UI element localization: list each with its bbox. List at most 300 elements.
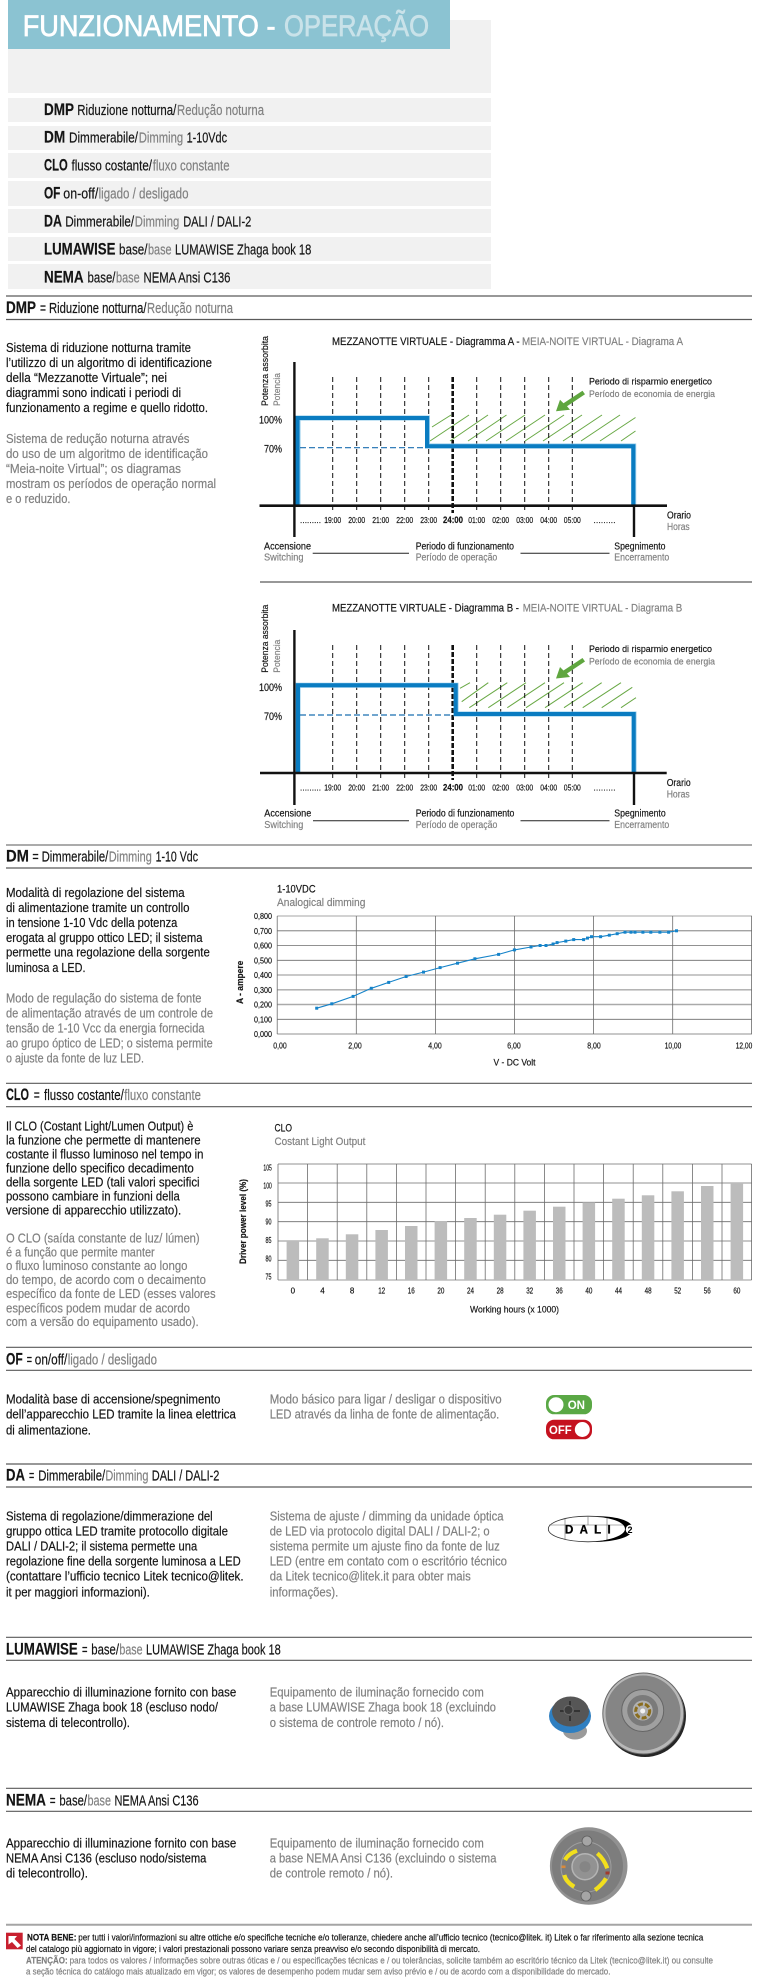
time labels: 04:00 <box>540 516 558 525</box>
text: DA Italian: gruppo ottica LED tramite protocollo digitale <box>6 1524 228 1538</box>
time labels: ......... <box>300 516 321 525</box>
text: DM Italian: erogata al gruppo ottico LED; il sistema <box>6 931 203 945</box>
time labels: 21:00 <box>372 516 390 525</box>
y tick labels: 0,000 <box>254 1030 272 1039</box>
level labels: 100% <box>259 682 282 694</box>
summary list of functions: LUMAWISE Zhaga book 18 <box>175 243 311 259</box>
heading: DA: Dimmerabile/ <box>38 1468 106 1484</box>
x tick labels: 44 <box>615 1286 622 1295</box>
text: NEMA Portuguese <box>270 1836 496 1880</box>
heading: LUMAWISE: base <box>119 1642 143 1658</box>
power line <box>298 685 634 773</box>
heading: OF: OF <box>6 1349 23 1368</box>
y axis label: Potencia <box>272 372 283 406</box>
heading: OF <box>6 1347 752 1370</box>
y tick labels: 100 <box>263 1182 272 1190</box>
time labels: 03:00 <box>516 516 534 525</box>
text: LUMAWISE Italian: sistema di telecontrollo). <box>6 1716 130 1730</box>
x axis title: Horas <box>667 790 690 800</box>
time labels: 22:00 <box>396 784 414 792</box>
x tick labels: 48 <box>645 1286 652 1295</box>
time labels <box>300 515 616 525</box>
y axis label <box>260 604 283 673</box>
text: OF Italian: Modalità base di accensione/spegnimento <box>6 1392 220 1406</box>
heading: LUMAWISE: = <box>82 1642 88 1658</box>
timeline labels: Período de operação <box>416 820 498 831</box>
summary list of functions: base <box>148 243 172 259</box>
text: CLO Italian: della sorgente LED (tali valori specifici <box>6 1176 200 1190</box>
diagram A <box>259 335 716 564</box>
time labels: 21:00 <box>372 784 390 792</box>
heading: OF: = <box>27 1352 32 1368</box>
title: FUNZIONAMENTO - <box>23 10 276 43</box>
text: DMP Portuguese: e o reduzido. <box>6 492 70 506</box>
y tick labels <box>263 1163 272 1282</box>
text: CLO Portuguese: específico da fonte de LED (esses valores <box>6 1287 216 1301</box>
y tick labels: 105 <box>263 1163 272 1172</box>
text: CLO Italian: possono cambiare in funzioni della <box>6 1189 180 1203</box>
x tick labels: 4 <box>320 1286 325 1295</box>
title: OPERAÇÃO <box>284 9 429 43</box>
text: NEMA Italian: NEMA Ansi C136 (escluso nodo/sistema <box>6 1851 206 1865</box>
icon: DALI-2 logo: 2 <box>628 1525 633 1535</box>
heading: LUMAWISE <box>6 1637 752 1660</box>
teal title band <box>8 0 450 49</box>
text: DMP Italian: Sistema di riduzione notturna tramite <box>6 341 191 355</box>
time labels: 23:00 <box>420 784 438 792</box>
timeline labels: Accensione <box>264 809 312 820</box>
note Portuguese: ATENÇÃO: <box>26 1955 68 1966</box>
summary list of functions: 1-10Vdc <box>187 131 227 147</box>
axis titles <box>235 961 536 1069</box>
text: LUMAWISE Portuguese: o sistema de controle remoto / nó). <box>270 1716 444 1730</box>
text: CLO Italian: costante il flusso luminoso nel tempo in <box>6 1148 204 1162</box>
text: CLO Italian <box>6 1120 204 1217</box>
heading: DMP <box>6 296 752 320</box>
time labels: 01:00 <box>468 784 486 792</box>
text: NEMA Portuguese: de controle remoto / nó). <box>270 1866 393 1880</box>
text: OF Portuguese: Modo básico para ligar / desligar o dispositivo <box>270 1392 502 1406</box>
timeline labels: Periodo di funzionamento <box>416 809 515 820</box>
heading: NEMA: NEMA <box>6 1790 46 1809</box>
icon: warning arrow <box>6 1933 23 1949</box>
text: DM Italian: in tensione 1-10 Vdc della potenza <box>6 916 177 930</box>
text: DMP Portuguese: mostram os períodos de operação normal <box>6 477 216 491</box>
diagram B: MEZZANOTTE VIRTUALE - Diagramma B - <box>332 603 519 615</box>
heading: LUMAWISE: LUMAWISE <box>6 1639 78 1658</box>
time labels: 24:00 <box>443 782 463 792</box>
text: DM Portuguese: de alimentação através de um controle de <box>6 1007 213 1021</box>
level labels: 100% <box>259 415 282 427</box>
x tick labels: 52 <box>674 1286 682 1295</box>
timeline labels: Spegnimento <box>614 809 666 820</box>
level labels: 70% <box>264 711 282 723</box>
data line <box>315 929 678 1010</box>
y tick labels: 0,500 <box>254 956 272 965</box>
text: DA Portuguese: informações). <box>270 1585 338 1599</box>
text: NEMA Portuguese: Equipamento de iluminação fornecido com <box>270 1836 484 1850</box>
level labels <box>259 415 282 456</box>
text: DA Italian: regolazione fine della sorgente luminosa a LED <box>6 1554 241 1568</box>
summary list of functions: Dimmerabile/ <box>65 215 135 231</box>
y tick labels: 0,600 <box>254 942 272 950</box>
text: DM Portuguese <box>6 992 213 1066</box>
timeline labels: Período de operação <box>416 553 498 564</box>
text: DA Portuguese: sistema permite um ajuste fino da fonte de luz <box>270 1539 500 1553</box>
diagram B <box>259 582 752 831</box>
heading: DMP: = <box>40 301 46 317</box>
x tick labels: 6,00 <box>507 1042 521 1050</box>
summary list of functions: fluxo constante <box>153 159 230 175</box>
summary list of functions: NEMA <box>44 267 84 286</box>
x tick labels: 4,00 <box>428 1042 442 1050</box>
text: CLO Portuguese: do tempo, de acordo com o decaimento <box>6 1273 206 1287</box>
chart grid <box>277 916 752 1034</box>
axes <box>260 630 667 805</box>
text: DM Italian: permette una regolazione della sorgente <box>6 946 210 960</box>
x tick labels: 60 <box>733 1286 741 1295</box>
diagram B: MEIA-NOITE VIRTUAL - Diagrama B <box>523 603 682 615</box>
hour grid <box>333 377 572 513</box>
axis titles <box>238 1179 559 1316</box>
y tick labels: 0,200 <box>254 1000 272 1010</box>
bar chart: CLO <box>238 1122 752 1316</box>
timeline labels: Encerramento <box>614 553 670 564</box>
text: CLO Portuguese <box>6 1231 216 1329</box>
text: LUMAWISE Italian: Apparecchio di illuminazione fornito con base <box>6 1685 236 1699</box>
time labels: ......... <box>300 784 321 792</box>
summary list of functions: ligado / desligado <box>99 187 188 203</box>
text: DA Italian: it per maggiori informazioni). <box>6 1585 150 1599</box>
text: DM Portuguese: o ajuste da fonte de luz LED. <box>6 1052 144 1066</box>
text: DM Italian: Modalità di regolazione del sistema <box>6 886 185 900</box>
x tick labels: 10,00 <box>665 1042 682 1050</box>
icon: NEMA socket <box>550 1827 628 1905</box>
axes <box>260 362 667 537</box>
text: DM Portuguese: Modo de regulação do sistema de fonte <box>6 992 202 1006</box>
y axis label: Potenza assorbita <box>260 335 271 406</box>
line chart: 1-10VDC: Analogical dimming <box>277 897 365 909</box>
toggle on: ON <box>568 1400 585 1412</box>
text: DMP Portuguese: Sistema de redução noturna através <box>6 432 190 446</box>
time labels: 24:00 <box>443 515 463 525</box>
text: OF Portuguese: LED através da linha de fonte de alimentação. <box>270 1408 499 1422</box>
note Italian: NOTA BENE: <box>27 1932 76 1943</box>
text: NEMA Italian: Apparecchio di illuminazione fornito con base <box>6 1836 236 1850</box>
time labels: 02:00 <box>492 784 510 792</box>
axis titles: Driver power level (%) <box>238 1179 248 1264</box>
x axis title <box>667 510 691 533</box>
text: DA Italian: DALI / DALI-2; il sistema permette una <box>6 1539 197 1553</box>
text: DMP Italian: funzionamento a regime e quello ridotto. <box>6 401 208 415</box>
timeline labels: Spegnimento <box>614 541 666 552</box>
summary list of functions: Redução noturna <box>177 103 265 119</box>
x tick labels: 8,00 <box>587 1042 601 1050</box>
icon: Lumawise connector <box>549 1696 591 1740</box>
level labels <box>259 682 282 723</box>
x tick labels: 2,00 <box>348 1042 362 1050</box>
footer note <box>6 1925 752 1977</box>
heading: DMP: DMP <box>6 298 36 317</box>
summary list of functions: base/ <box>88 270 116 286</box>
text: CLO Italian: la funzione che permette di mantenere <box>6 1134 201 1148</box>
time labels: ......... <box>594 784 616 792</box>
power line <box>298 418 634 505</box>
saving legend <box>589 644 716 667</box>
summary list of functions: base <box>116 270 140 286</box>
x tick labels: 28 <box>497 1286 504 1295</box>
note Portuguese: a seção técnica do catálogo mais atualizado em vigor; os valores de desempenho podem mudar sem aviso prévio e / ou de acordo com a disponibilidade do mercado. <box>26 1966 610 1977</box>
heading: DMP: Redução noturna <box>147 301 234 317</box>
heading: CLO: flusso costante/ <box>44 1088 125 1104</box>
axis titles: A - ampere <box>235 961 245 1004</box>
summary list of functions: on-off/ <box>63 187 99 203</box>
y tick labels: 75 <box>266 1273 272 1282</box>
text: DA Portuguese <box>270 1509 507 1599</box>
text: CLO Italian: versione di apparecchio utilizzato). <box>6 1203 181 1217</box>
text: LUMAWISE Portuguese <box>270 1685 496 1730</box>
x tick labels: 40 <box>585 1286 593 1295</box>
x tick labels <box>273 1042 753 1050</box>
text: DA Portuguese: LED (entre em contato com o escritório técnico <box>270 1554 507 1568</box>
level labels: 70% <box>264 444 282 456</box>
heading: NEMA: base <box>88 1793 111 1809</box>
text: DA Portuguese: de LED via protocolo digital DALI / DALI-2; o <box>270 1524 490 1538</box>
summary list of functions: DALI / DALI-2 <box>183 215 251 231</box>
x tick labels: 32 <box>526 1286 534 1295</box>
heading: DA: DA <box>6 1465 25 1484</box>
y tick labels: 0,400 <box>254 971 272 980</box>
heading: DA: = <box>29 1468 34 1484</box>
y tick labels: 0,700 <box>254 927 272 936</box>
text: CLO Italian: Il CLO (Costant Light/Lumen Output) è <box>6 1120 193 1134</box>
time labels: 20:00 <box>348 516 366 525</box>
timeline labels <box>264 809 670 831</box>
text: DA Italian <box>6 1509 244 1599</box>
summary list of functions: OF <box>44 184 60 203</box>
text: DA Portuguese: da Litek tecnico@litek.it para obter mais <box>270 1569 471 1583</box>
y axis label: Potencia <box>272 639 283 673</box>
heading: OF: ligado / desligado <box>68 1352 157 1368</box>
note Portuguese <box>26 1955 713 1977</box>
text: OF Portuguese <box>270 1392 502 1422</box>
heading: NEMA: base/ <box>59 1793 88 1809</box>
text: DA Portuguese: Sistema de ajuste / dimming da unidade óptica <box>270 1509 504 1523</box>
summary list of functions: Riduzione notturna/ <box>77 103 177 119</box>
text: DMP Italian: diagrammi sono indicati i periodi di <box>6 386 181 400</box>
y tick labels: 80 <box>266 1254 272 1263</box>
time labels: 02:00 <box>492 516 510 525</box>
heading: CLO: fluxo constante <box>124 1088 201 1104</box>
x tick labels: 0 <box>291 1286 296 1295</box>
summary list of functions: base/ <box>119 243 148 259</box>
x tick labels: 56 <box>704 1286 711 1295</box>
summary list of functions: NEMA Ansi C136 <box>144 270 230 286</box>
text: DM Portuguese: ao grupo óptico de LED; o sistema permite <box>6 1037 213 1051</box>
text: DM Portuguese: tensão de 1-10 Vcc da energia fornecida <box>6 1022 205 1036</box>
text: LUMAWISE Italian: LUMAWISE Zhaga book 18 (escluso nodo/ <box>6 1700 218 1714</box>
hour grid <box>333 645 572 780</box>
heading: NEMA <box>6 1788 752 1811</box>
summary list of functions: flusso costante/ <box>72 159 153 175</box>
timeline labels: Encerramento <box>614 820 670 831</box>
saving legend: Periodo di risparmio energetico <box>589 377 712 388</box>
heading: DM <box>6 845 752 868</box>
y axis label <box>260 335 283 406</box>
summary list of functions: CLO <box>44 156 68 175</box>
y tick labels <box>254 912 272 1039</box>
time labels: 19:00 <box>324 784 342 792</box>
y tick labels: 95 <box>266 1200 272 1209</box>
text: CLO Portuguese: é a função que permite manter <box>6 1245 155 1259</box>
text: DA Italian: (contattare l’ufficio tecnico Litek tecnico@litek. <box>6 1569 244 1583</box>
text: NEMA Italian: di telecontrollo). <box>6 1866 88 1880</box>
text: DMP Italian: della “Mezzanotte Virtuale”; nei <box>6 371 167 385</box>
x tick labels <box>291 1286 741 1295</box>
heading: DM: 1-10 Vdc <box>156 850 198 866</box>
heading: OF: on/off/ <box>35 1352 68 1368</box>
time labels: ......... <box>594 516 616 525</box>
time labels: 20:00 <box>348 784 366 792</box>
x tick labels: 12,00 <box>736 1042 753 1050</box>
timeline labels: Periodo di funzionamento <box>416 541 514 552</box>
text: DMP Italian: l’utilizzo di un algoritmo di identificazione <box>6 356 212 370</box>
y tick labels: 90 <box>266 1218 272 1227</box>
time labels: 05:00 <box>564 516 581 525</box>
text: NEMA Italian <box>6 1836 236 1880</box>
text: NEMA Portuguese: a base NEMA Ansi C136 (excluindo o sistema <box>270 1851 496 1865</box>
text: DMP Portuguese <box>6 432 216 506</box>
saving legend <box>589 377 716 400</box>
chart grid <box>278 1164 752 1280</box>
bars <box>287 1183 743 1280</box>
note Italian: del catalogo più aggiornato in vigore; i valori prestazionali possono variare senza preavviso e/o secondo disponibilità di mercato. <box>26 1944 480 1955</box>
heading: CLO: CLO <box>6 1085 29 1104</box>
toggle off: OFF <box>549 1425 572 1437</box>
saving legend: Período de economia de energia <box>589 389 716 400</box>
text: OF Italian: di alimentazione. <box>6 1423 91 1437</box>
saving legend: Período de economia de energia <box>589 656 716 667</box>
axis titles: V - DC Volt <box>494 1058 536 1069</box>
axis titles: Working hours (x 1000) <box>470 1305 559 1316</box>
text: DM Italian: luminosa a LED. <box>6 961 86 975</box>
summary list of functions <box>8 98 491 289</box>
x tick labels: 8 <box>350 1286 355 1295</box>
heading: DM: = <box>32 850 39 866</box>
bar chart: CLO: Costant Light Output <box>274 1136 365 1148</box>
heading: DM: DM <box>6 847 29 866</box>
heading: DA: DALI / DALI-2 <box>152 1468 219 1484</box>
x tick labels: 12 <box>378 1286 386 1295</box>
time labels: 04:00 <box>540 784 558 792</box>
title <box>23 9 429 43</box>
text: CLO Portuguese: O CLO (saída constante de luz/ lúmen) <box>6 1231 200 1245</box>
heading: LUMAWISE: base/ <box>91 1642 120 1658</box>
summary list of functions: Dimming <box>135 215 179 231</box>
text: OF Italian: dell’apparecchio LED tramite la linea elettrica <box>6 1408 236 1422</box>
x tick labels: 36 <box>556 1286 563 1295</box>
timeline labels: Switching <box>264 553 304 564</box>
x tick labels: 16 <box>408 1286 415 1295</box>
y axis label: Potenza assorbita <box>260 604 271 673</box>
saving legend: Periodo di risparmio energetico <box>589 644 712 655</box>
line chart: 1-10VDC <box>235 883 753 1069</box>
text: DMP Italian <box>6 341 212 415</box>
text: CLO Portuguese: o fluxo luminoso constante ao longo <box>6 1259 188 1273</box>
grey header panel <box>8 20 491 93</box>
x tick labels: 20 <box>437 1286 445 1295</box>
heading: DA: Dimming <box>105 1468 148 1484</box>
text: LUMAWISE Portuguese: a base LUMAWISE Zhaga book 18 (excluindo <box>270 1700 496 1714</box>
text: OF Italian <box>6 1392 236 1437</box>
note Italian <box>26 1932 704 1955</box>
heading: DMP: Riduzione notturna/ <box>49 301 147 317</box>
text: CLO Italian: funzione dello specifico decadimento <box>6 1162 194 1176</box>
arrow: saving period <box>556 391 585 411</box>
text: LUMAWISE Italian <box>6 1685 236 1730</box>
diagram A: MEZZANOTTE VIRTUALE - Diagramma A - <box>332 336 520 348</box>
time labels: 19:00 <box>324 516 342 525</box>
text: DM Italian <box>6 886 210 975</box>
time labels: 22:00 <box>396 516 414 525</box>
text: CLO Portuguese: específicos podem mudar de acordo <box>6 1301 190 1315</box>
time labels: 05:00 <box>564 784 581 792</box>
icon: on/off toggles <box>546 1395 592 1439</box>
text: DMP Portuguese: do uso de um algoritmo de identificação <box>6 447 208 461</box>
x axis title: Orario <box>667 778 691 789</box>
icon: DALI-2 logo: DALI <box>565 1524 611 1536</box>
header block <box>8 0 491 93</box>
bar chart: CLO: CLO <box>274 1122 292 1134</box>
heading: CLO: = <box>34 1088 40 1104</box>
y tick labels: 85 <box>266 1236 272 1245</box>
summary list of functions: LUMAWISE <box>44 240 116 259</box>
timeline labels: Switching <box>264 820 303 831</box>
summary list of functions: Dimming <box>139 131 183 147</box>
x axis title: Orario <box>667 510 691 522</box>
heading: LUMAWISE: LUMAWISE Zhaga book 18 <box>146 1642 281 1658</box>
heading: DM: Dimming <box>109 850 152 866</box>
time labels: 23:00 <box>420 516 438 525</box>
heading: DM: Dimmerabile/ <box>42 850 109 866</box>
timeline labels <box>264 541 670 564</box>
heading: NEMA: = <box>50 1793 56 1809</box>
text: DMP Portuguese: “Meia-noite Virtual”; os diagramas <box>6 462 181 476</box>
summary list of functions: Dimmerabile/ <box>69 131 139 147</box>
text: LUMAWISE Portuguese: Equipamento de iluminação fornecido com <box>270 1685 484 1699</box>
diagram A: MEIA-NOITE VIRTUAL - Diagrama A <box>522 336 684 348</box>
time labels <box>300 782 616 792</box>
energy-saving hatch <box>430 415 636 441</box>
y tick labels: 0,100 <box>254 1015 272 1024</box>
energy-saving hatch <box>460 683 636 708</box>
text: DA Italian: Sistema di regolazione/dimmerazione del <box>6 1509 213 1523</box>
x tick labels: 0,00 <box>273 1042 287 1050</box>
time labels: 03:00 <box>516 784 534 792</box>
time labels: 01:00 <box>468 516 486 525</box>
line chart: 1-10VDC: 1-10VDC <box>277 883 316 895</box>
icon: DALI-2 logo <box>548 1516 635 1542</box>
heading: CLO <box>6 1083 752 1107</box>
arrow: saving period <box>556 658 585 678</box>
heading: DA <box>6 1464 752 1487</box>
summary list of functions: DMP <box>44 100 74 119</box>
heading: NEMA: NEMA Ansi C136 <box>114 1793 199 1809</box>
y tick labels: 0,300 <box>254 986 272 995</box>
text: CLO Portuguese: com a versão do equipamento usado). <box>6 1315 199 1329</box>
x tick labels: 24 <box>467 1286 474 1295</box>
x axis title: Horas <box>667 522 690 533</box>
